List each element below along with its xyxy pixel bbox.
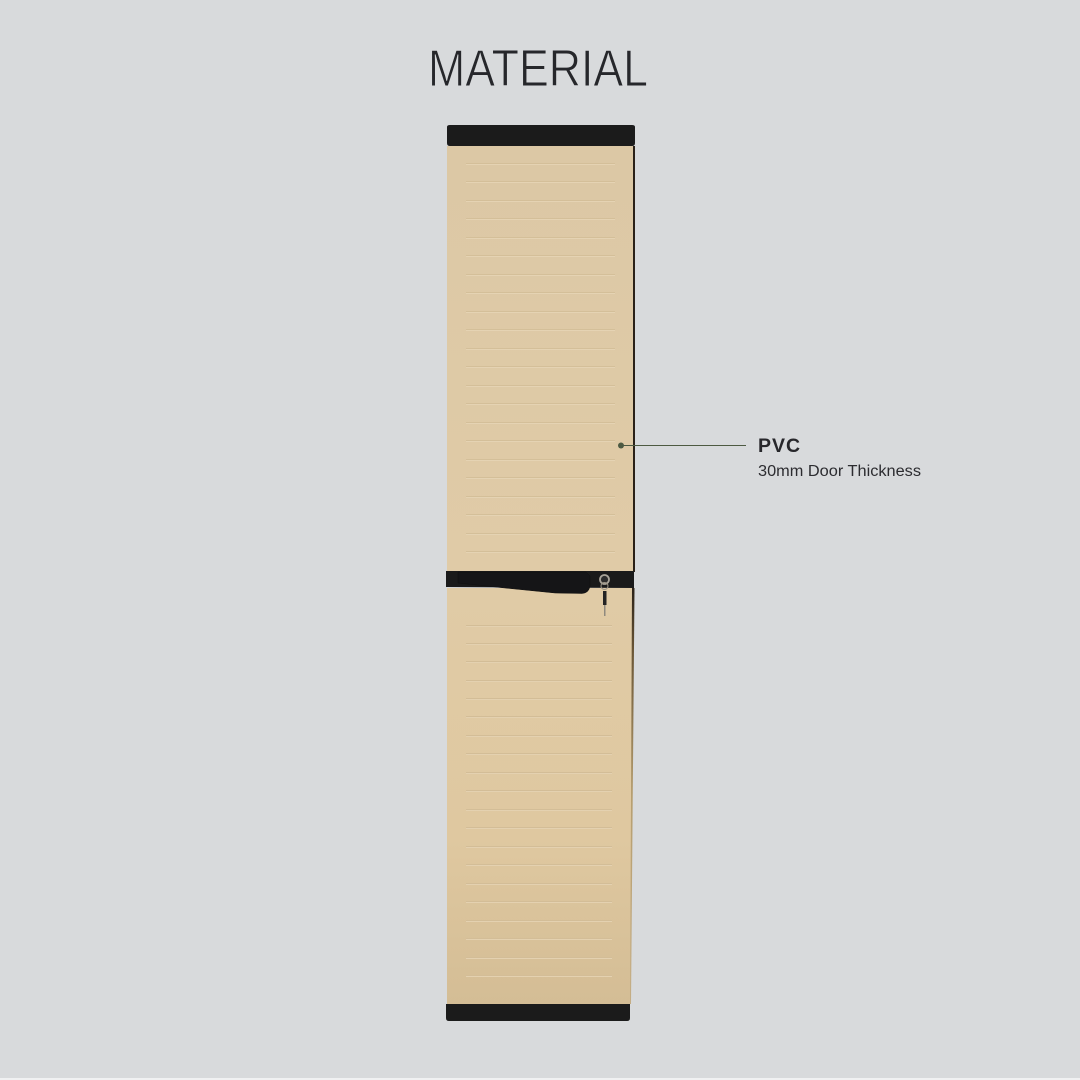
callout label: PVC: 30mm Door Thickness	[758, 463, 921, 480]
callout label: PVC: PVC	[758, 435, 801, 457]
cabinet top cap	[447, 125, 635, 146]
cabinet	[446, 125, 635, 1021]
cabinet lower door	[447, 588, 634, 1004]
callout label: PVC	[758, 435, 921, 480]
callout line and marker	[618, 442, 746, 448]
title: MATERIAL	[428, 40, 648, 98]
lock and key	[600, 575, 609, 616]
cabinet upper door	[447, 146, 635, 572]
cabinet bottom base	[446, 1004, 630, 1021]
cabinet middle band	[446, 571, 634, 588]
door handle	[458, 572, 590, 594]
